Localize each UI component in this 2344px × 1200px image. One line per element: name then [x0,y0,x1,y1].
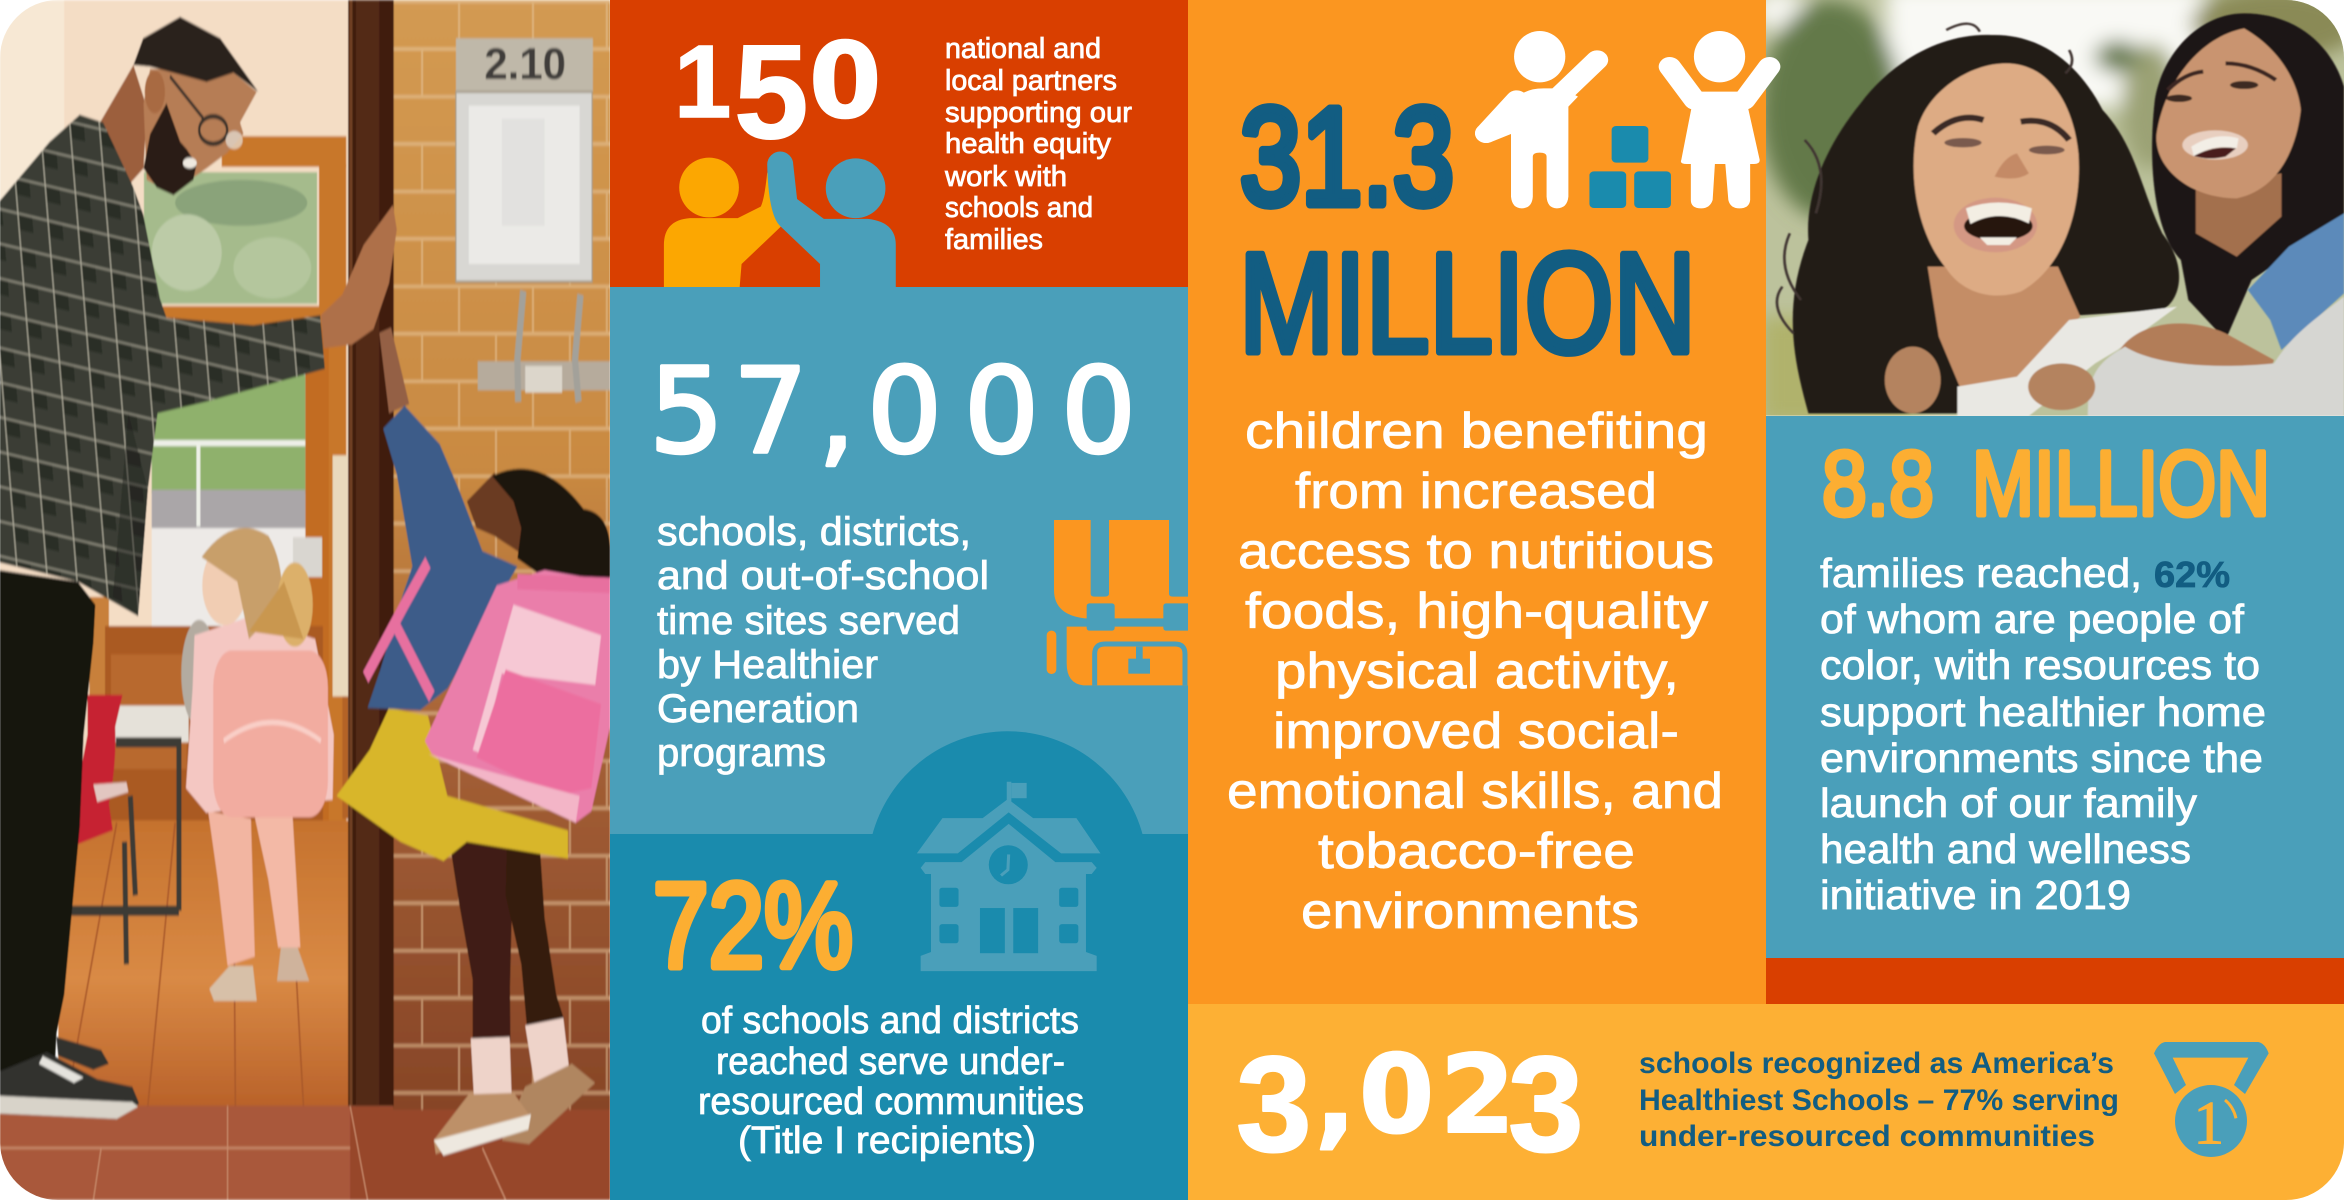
text: families description: environments since the [1820,735,2263,781]
text: title I description: resourced communities [698,1081,1084,1123]
mother hair [1793,35,2179,413]
panel: 3,023 schools (yellow) [1188,1004,2344,1200]
icon: two people high-fiving [664,152,896,287]
statistic: 150: 1 [674,24,731,139]
teacher neck [100,65,147,184]
mother neck [1928,267,2080,390]
text: families description: health and wellness [1820,826,2191,872]
text: title I description: (Title I recipients) [738,1120,1036,1162]
small girl with pink backpack [181,528,334,1001]
teacher plaid shirt [0,115,325,616]
text: schools description: time sites served [657,599,960,643]
arch behind school [872,731,1143,836]
text: children description: improved social- [1273,703,1679,759]
red strip [1766,958,2344,1004]
grey sleeve [2088,297,2344,417]
text: schools description: schools, districts, [657,510,971,554]
statistic: 3,023: 2 [1440,1033,1515,1158]
text: children description [1227,403,1723,939]
text: schools description: by Healthier [657,643,878,687]
text: children description: foods, high-quality [1245,583,1708,639]
statistic: 3,023: 3 [1236,1028,1312,1180]
text: partners description: local partners [945,65,1117,97]
icon: school building [917,782,1101,971]
statistic: 31.3 million: MILLION [1239,224,1696,383]
statistic: 31.3 million [1239,80,1696,383]
text: families description: launch of our family [1820,780,2198,826]
icon: medal: 1 [2193,1089,2224,1157]
statistic: 3,023: 0 [1359,1033,1434,1158]
text: children description: children benefiting [1245,403,1708,459]
teacher trousers and shoes [0,570,139,1119]
text: America's Healthiest Schools description: Healthiest Schools – 77% serving [1639,1084,2119,1117]
girl arm [2118,324,2274,370]
text: America's Healthiest Schools description [1639,1047,2119,1153]
coat hooks [478,291,610,402]
blurred garden background [1753,0,2344,423]
text: families description: families reached, [1820,550,2142,596]
text: children description: access to nutritious [1238,523,1714,579]
text: schools description: programs [657,731,826,775]
panel: 150 partners (red) [610,0,1188,287]
icon: children with blocks [1486,31,1769,208]
text: title I description: of schools and districts [701,1000,1079,1042]
text: partners description: supporting our [945,97,1132,129]
panel: 72% under-resourced (dark teal) [610,731,1188,1200]
mother face [1914,63,2079,296]
text: partners description: schools and [945,192,1093,224]
statistic: 8.8 million: MILLION [1972,433,2270,535]
icon: medal [2154,1042,2269,1157]
text: families description: 62% [2154,554,2230,595]
white shirt [1957,307,2177,417]
statistic: 150: 0 [809,20,881,142]
statistic: 8.8 million: 8.8 [1822,433,1934,535]
panel: left photo of teacher high-fiving students [0,0,610,1200]
panel: right photo of laughing mother and daughter [1753,0,2344,423]
text: schools description: and out-of-school [657,554,989,598]
room number sign: 2.10 [484,40,566,89]
girl hair [2152,13,2344,340]
icon: backpack [1047,520,1192,685]
text: title I description: reached serve under- [716,1041,1065,1083]
teacher arm hand [321,205,397,348]
panel: 8.8 million families (teal) [1766,416,2344,958]
text: America's Healthiest Schools description: schools recognized as America’s [1639,1047,2114,1080]
text: families description: support healthier home [1820,689,2266,735]
panel: 57,000 schools (teal) [610,287,1192,834]
girl face [2156,28,2301,198]
text: title I description [698,1000,1084,1162]
text: children description: from increased [1295,463,1657,519]
girl hands [1885,347,2095,413]
brick wall [393,0,610,1110]
statistic: 72%: 72% [653,857,853,993]
chair and table [62,695,189,964]
text: families description: color, with resources to [1820,642,2260,688]
teacher head [133,17,258,195]
statistic: 150: 5 [734,18,809,167]
floor [58,820,350,1107]
panel: 31.3 million children (orange) [1188,0,1769,1004]
statistic: 3,023: , [1315,1035,1356,1160]
girl reaching up with pink backpack [337,328,610,1156]
text: children description: tobacco-free [1318,823,1635,879]
text: schools description [657,510,989,775]
floor tiles [0,1106,610,1200]
door frame [348,0,394,1106]
text: children description: environments [1301,883,1639,939]
text: families description: of whom are people of [1820,596,2245,642]
window frame [161,136,346,823]
girl denim jacket [2248,213,2344,350]
text: partners description [944,33,1132,256]
text: families description [1820,550,2266,918]
statistic: 31.3 million: 31.3 [1240,80,1454,234]
girl neck [2196,173,2281,257]
text: children description: physical activity, [1275,643,1679,699]
room number sign [456,38,593,282]
statistic: 8.8 million [1822,433,2270,535]
text: schools description: Generation [657,687,859,731]
text: partners description: national and [945,33,1101,65]
text: partners description: work with [944,161,1067,193]
text: America's Healthiest Schools description: under-resourced communities [1639,1120,2095,1153]
text: partners description: families [945,224,1043,256]
text: children description: emotional skills, and [1227,763,1723,819]
text: families description: initiative in 2019 [1820,872,2131,918]
statistic: 57,000: 57,000 [649,342,1136,480]
text: partners description: health equity [945,128,1111,160]
statistic: 3,023: 3 [1508,1028,1584,1180]
